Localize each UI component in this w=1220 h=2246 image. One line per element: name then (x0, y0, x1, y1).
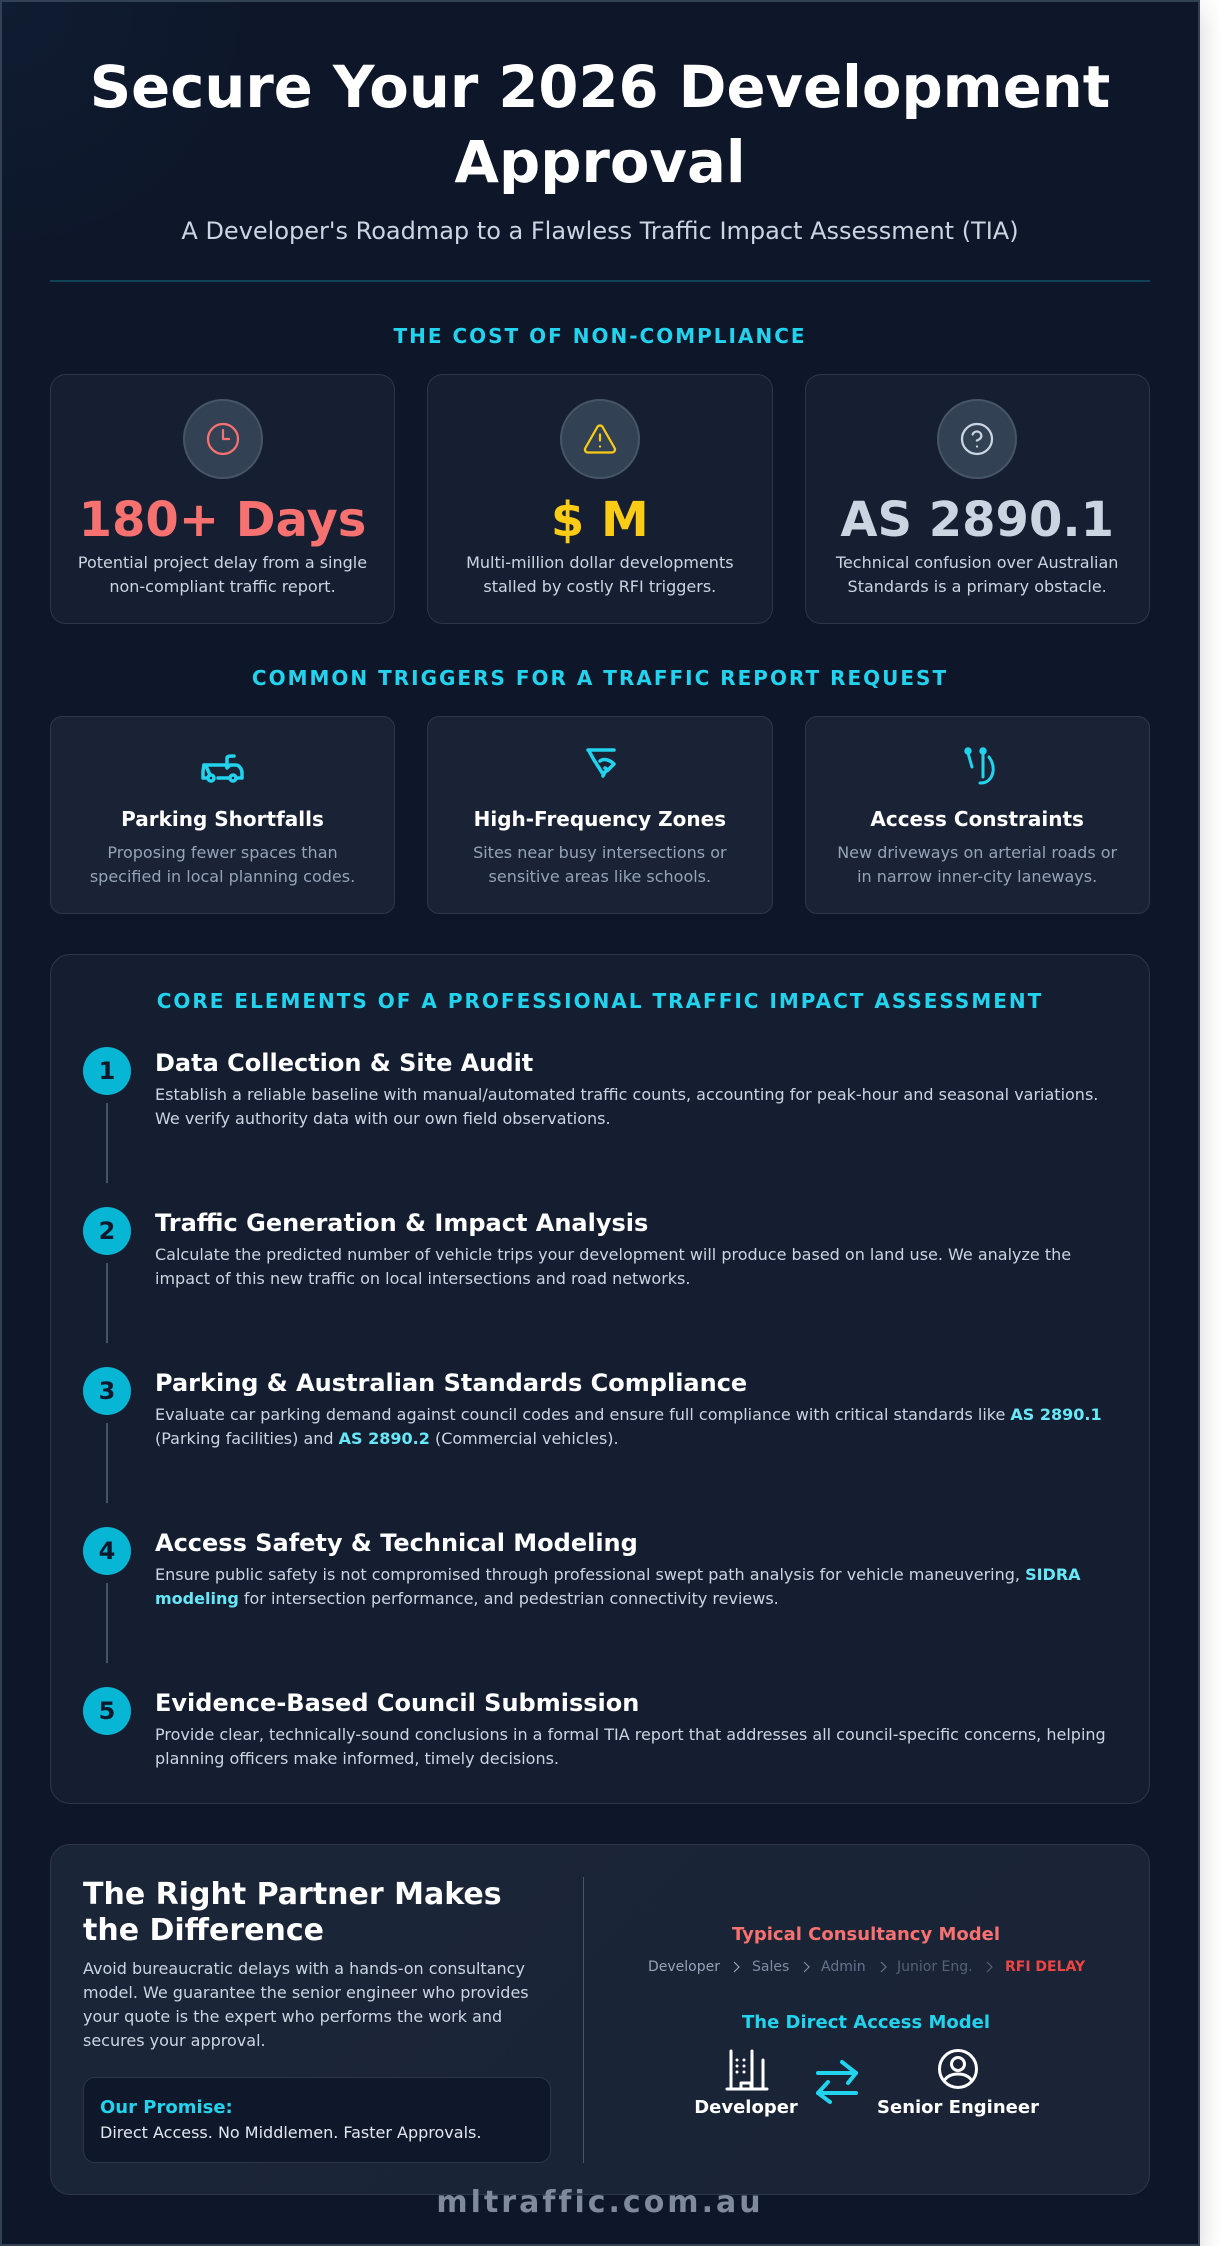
step description: Calculate the predicted number of vehicle trips your development will produce based on land use. We analyze the (155, 1245, 1071, 1264)
heading: core elements: CORE ELEMENTS OF A PROFESSIONAL TRAFFIC IMPACT ASSESSMENT (157, 989, 1043, 1013)
promise box (83, 2077, 551, 2163)
typical model chain (648, 1959, 1086, 1975)
card description: Proposing fewer spaces than (107, 843, 338, 862)
step number (83, 1527, 131, 1575)
icon: clock (183, 399, 263, 479)
card description: New driveways on arterial roads or (837, 843, 1117, 862)
connector (106, 1263, 108, 1343)
step description: modeling for intersection performance, and pedestrian connectivity reviews. (155, 1589, 779, 1608)
icon: intersection marker (586, 748, 616, 778)
step 2 (83, 1207, 1071, 1343)
chain: developer: Developer (648, 1959, 720, 1975)
subtitle: A Developer's Roadmap to a Flawless Traffic Impact Assessment (TIA) (181, 217, 1019, 245)
stat description: non-compliant traffic report. (109, 577, 336, 596)
panel: the right partner (50, 1844, 1150, 2195)
vertical divider (583, 1877, 584, 2163)
icon: developer building (726, 2050, 768, 2090)
label: senior engineer: Senior Engineer (877, 2097, 1039, 2118)
heading: cost of non-compliance: THE COST OF NON-COMPLIANCE (393, 324, 807, 348)
step 5 (83, 1687, 1106, 1768)
partner heading (83, 1877, 502, 1948)
icon: warning triangle (560, 399, 640, 479)
icon: senior engineer (938, 2049, 978, 2089)
step title: Traffic Generation & Impact Analysis (155, 1209, 648, 1237)
heading: common triggers: COMMON TRIGGERS FOR A TRAFFIC REPORT REQUEST (252, 666, 948, 690)
card description: sensitive areas like schools. (489, 867, 711, 886)
step number (83, 1207, 131, 1255)
chain: admin: Admin (821, 1959, 866, 1975)
step description (155, 1085, 1098, 1128)
step description: We verify authority data with our own field observations. (155, 1109, 611, 1128)
chain: sales: Sales (752, 1959, 789, 1975)
chain: chevron (986, 1962, 993, 1972)
step number: 4 (99, 1537, 115, 1565)
chain: junior engineer: Junior Eng. (897, 1959, 973, 1975)
step 3 (83, 1367, 1102, 1503)
partner paragraph: model. We guarantee the senior engineer who provides (83, 1983, 529, 2002)
panel: parking shortfalls (50, 716, 395, 914)
step description: Provide clear, technically-sound conclusions in a formal TIA report that addresses all council-specific concerns, helping (155, 1725, 1106, 1744)
connector (106, 1423, 108, 1503)
card title: Access Constraints (870, 807, 1084, 831)
stat description: Technical confusion over Australian (836, 553, 1118, 572)
stat value: 180+ Days (79, 492, 366, 548)
panel: high-frequency zones (427, 716, 773, 914)
partner paragraph: your quote is the expert who performs the work and (83, 2007, 502, 2026)
panel: AS 2890.1 stat (805, 374, 1150, 624)
card description (473, 843, 727, 886)
stat description: Standards is a primary obstacle. (848, 577, 1107, 596)
stat description: Potential project delay from a single (78, 553, 367, 572)
step description: impact of this new traffic on local intersections and road networks. (155, 1269, 690, 1288)
panel: 180+ days stat (50, 374, 395, 624)
step description (155, 1565, 1081, 1608)
step description (155, 1725, 1106, 1768)
icon: question circle (937, 399, 1017, 479)
partner paragraph: Avoid bureaucratic delays with a hands-on consultancy (83, 1959, 525, 1978)
connector (106, 1583, 108, 1663)
stat description: Multi-million dollar developments (466, 553, 734, 572)
step description (155, 1405, 1102, 1448)
icon: access road (964, 747, 995, 784)
chain: RFI delay: RFI DELAY (1005, 1959, 1085, 1975)
step description: Ensure public safety is not compromised through professional swept path analysis for vehicle maneuvering, SIDRA (155, 1565, 1081, 1584)
stat description (836, 553, 1118, 596)
card description (90, 843, 355, 886)
title (90, 54, 1110, 196)
title: Approval (454, 129, 746, 196)
card description: specified in local planning codes. (90, 867, 355, 886)
step description: Evaluate car parking demand against council codes and ensure full compliance with critical standards like AS 2890.1 (155, 1405, 1102, 1424)
promise text: Direct Access. No Middlemen. Faster Approvals. (100, 2123, 481, 2142)
stat value: $ M (551, 492, 649, 548)
partner paragraph: secures your approval. (83, 2031, 266, 2050)
step description: planning officers make informed, timely decisions. (155, 1749, 559, 1768)
stat description: stalled by costly RFI triggers. (483, 577, 716, 596)
step number: 3 (99, 1377, 115, 1405)
step description (155, 1245, 1071, 1288)
card description (837, 843, 1118, 886)
partner paragraph (83, 1959, 529, 2050)
chain: chevron (880, 1962, 887, 1972)
step number: 5 (99, 1697, 115, 1725)
step number (83, 1047, 131, 1095)
panel: access constraints (805, 716, 1150, 914)
card description: in narrow inner-city laneways. (857, 867, 1097, 886)
panel: core elements (50, 954, 1150, 1804)
typical model heading: Typical Consultancy Model (732, 1924, 1000, 1945)
step title: Evidence-Based Council Submission (155, 1689, 639, 1717)
title: Secure Your 2026 Development (90, 54, 1110, 121)
step number: 1 (99, 1057, 115, 1085)
partner heading: the Difference (83, 1913, 324, 1948)
stat description (466, 553, 734, 596)
step title: Data Collection & Site Audit (155, 1049, 533, 1077)
step number: 2 (99, 1217, 115, 1245)
step number (83, 1687, 131, 1735)
step title: Access Safety & Technical Modeling (155, 1529, 638, 1557)
step description: Establish a reliable baseline with manual/automated traffic counts, accounting for peak-hour and seasonal variations. (155, 1085, 1098, 1104)
panel: $ M stat (427, 374, 773, 624)
stat description (78, 553, 367, 596)
step title: Parking & Australian Standards Compliance (155, 1369, 747, 1397)
chain: chevron (734, 1962, 740, 1972)
step 4 (83, 1527, 1081, 1663)
label: developer: Developer (694, 2097, 798, 2118)
chain: chevron (804, 1962, 810, 1972)
partner heading: The Right Partner Makes (83, 1877, 502, 1912)
icon: two-way arrows (816, 2060, 858, 2104)
promise label: Our Promise: (100, 2097, 233, 2118)
connector (106, 1103, 108, 1183)
header divider (50, 280, 1150, 282)
step number (83, 1367, 131, 1415)
card title: Parking Shortfalls (121, 807, 324, 831)
stat value: AS 2890.1 (840, 492, 1114, 548)
card title: High-Frequency Zones (474, 807, 726, 831)
direct model heading: The Direct Access Model (742, 2012, 990, 2033)
card description: Sites near busy intersections or (473, 843, 727, 862)
step 1 (83, 1047, 1098, 1183)
step description: (Parking facilities) and AS 2890.2 (Commercial vehicles). (155, 1429, 619, 1448)
icon: parking car (201, 754, 244, 783)
footer website: mltraffic.com.au (436, 2185, 764, 2220)
